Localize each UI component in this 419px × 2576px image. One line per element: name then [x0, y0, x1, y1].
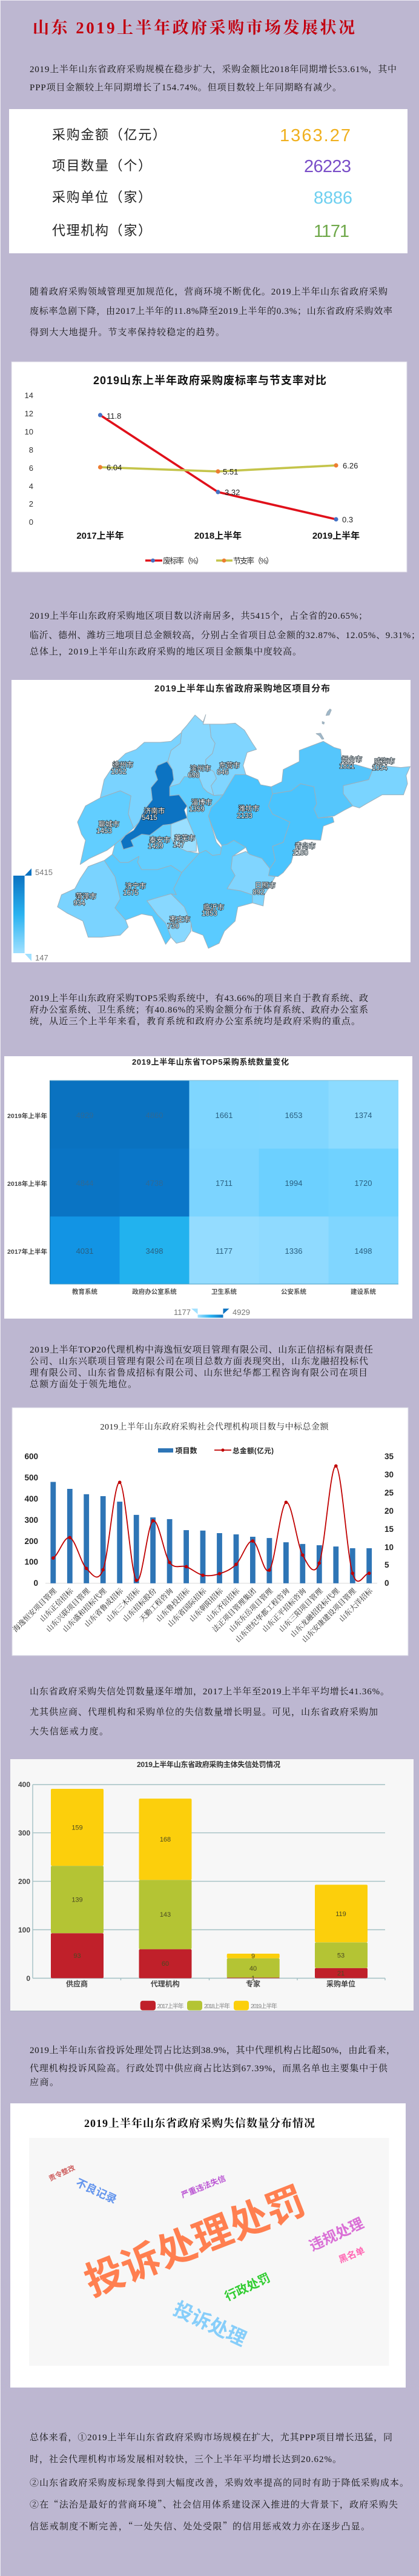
- text block: conclusion: 时，社会代理机构市场发展相对较快，三个上半年平均增长达到20.62%。: [30, 2454, 341, 2465]
- heat map values: 4844: [76, 1179, 93, 1188]
- legend: [140, 2001, 277, 2011]
- text block: top 5 systems: 2019上半年山东政府采购TOP5采购系统中，有43.66%的项目来自于教育系统、政: [30, 993, 368, 1003]
- stack: purchasing units: 21: [337, 1970, 345, 1977]
- data labels: 0.3: [342, 515, 353, 524]
- stack: experts: 9: [251, 1952, 255, 1960]
- city labels: 1429: [148, 843, 163, 850]
- heat map values: 4031: [76, 1246, 93, 1256]
- y axis labels: 0: [29, 518, 33, 527]
- heat map values: 4860: [146, 1111, 163, 1120]
- text block: conclusion: 信惩戒制度不断完善，“一处失信、处处受限”的信用惩戒效力亦在逐步凸显。: [30, 2520, 370, 2532]
- y axis labels: 12: [25, 409, 33, 418]
- city labels: 青岛市: [295, 842, 315, 850]
- stack: purchasing units: [315, 1885, 368, 1978]
- smooth line: total amount: [51, 1464, 371, 1582]
- map legend: 5415: [35, 868, 53, 877]
- rotated agency labels: 山东盛和招标代理: [61, 1586, 108, 1634]
- bars: project count: [50, 1482, 372, 1583]
- heat map values: 1653: [285, 1111, 302, 1120]
- rotated agency labels: 法正项目管理集团: [210, 1586, 258, 1634]
- heat map legend: [174, 1308, 250, 1317]
- city labels: 日照市: [255, 881, 275, 890]
- text block: conclusion: ②山东省政府采购废标现象得到大幅度改善，采购效率提高的同时有助于降低采购成本。: [30, 2477, 409, 2488]
- word cloud terms: 黑名单: [337, 2245, 366, 2265]
- text block: complaints: 应商。: [30, 2077, 59, 2088]
- heat map values: 1720: [355, 1179, 372, 1188]
- y axis labels: 100: [18, 1926, 30, 1934]
- right axis: 0: [384, 1579, 389, 1588]
- heat map values: 1994: [285, 1179, 302, 1188]
- stat: agencies: 代理机构（家）: [52, 223, 151, 238]
- heat map values: 4929: [76, 1111, 93, 1120]
- heat map values: 3498: [146, 1246, 163, 1256]
- city labels: 1054: [372, 765, 388, 772]
- rotated agency labels: 山东三阳项目管理: [277, 1586, 325, 1634]
- y axis labels: 4: [29, 482, 33, 491]
- text block: regions: 总体上，2019上半年山东政府采购的地区项目金额集中度较高。: [30, 646, 302, 657]
- rotated agency labels: 山东省鲁成招标: [82, 1586, 125, 1629]
- stat: purchase amount: [52, 126, 351, 145]
- text block: intro: [30, 64, 397, 93]
- heat map legend: 1177: [174, 1308, 191, 1317]
- map legend: [13, 868, 53, 962]
- data labels: 11.8: [107, 411, 121, 421]
- city labels: 698: [188, 772, 200, 779]
- rotated agency labels: 山东招标股份: [120, 1586, 158, 1623]
- city labels: 莱芜市: [174, 834, 195, 842]
- data labels: [107, 411, 358, 524]
- city labels: 934: [73, 900, 85, 907]
- heat map values: 1711: [216, 1179, 233, 1188]
- left axis: [24, 1452, 38, 1588]
- city labels: 1675: [123, 890, 139, 897]
- heat map values: [76, 1111, 372, 1256]
- legend: 废标率（%）: [163, 556, 203, 565]
- city labels: 892: [252, 889, 265, 896]
- rotated agency labels: 山东三木招标: [104, 1586, 142, 1623]
- city labels: 威海市: [374, 757, 395, 765]
- stack: suppliers: [51, 1789, 104, 1978]
- left axis: 500: [24, 1473, 38, 1482]
- rotated agency labels: 山东世纪华都工程咨询: [233, 1586, 291, 1644]
- y axis labels: 400: [18, 1780, 30, 1789]
- heat map values: 1336: [285, 1246, 302, 1256]
- city labels: 济宁市: [125, 882, 146, 890]
- y axis labels: 2: [29, 499, 33, 508]
- text block: agencies: 2019上半年TOP20代理机构中海逸恒安项目管理有限公司、山东正信招标有限责任: [30, 1344, 373, 1355]
- legend: 2019上半年: [251, 2002, 277, 2010]
- category labels: 2017上半年: [76, 530, 124, 541]
- chart legend: [158, 1446, 274, 1455]
- stack: experts: [227, 1952, 280, 1982]
- text block: regions: [30, 610, 419, 657]
- city labels: [73, 755, 395, 930]
- right axis: 10: [384, 1543, 394, 1552]
- row labels: 2018年上半年: [7, 1180, 47, 1188]
- panel: stacked bar chart: [10, 1759, 414, 2011]
- row labels: 2017年上半年: [7, 1248, 47, 1256]
- column labels: 公安系统: [281, 1288, 306, 1296]
- y axis labels: [18, 1780, 30, 1983]
- chart legend: 总金额(亿元): [233, 1446, 274, 1455]
- line: savings rate: [98, 463, 338, 474]
- column labels: 政府办公室系统: [132, 1288, 177, 1296]
- rotated agency labels: 天勤工程咨询: [137, 1586, 174, 1623]
- text block: efficiency: 得到大大地提升。节支率保持较稳定的趋势。: [30, 327, 225, 338]
- line: bid failure rate: [98, 413, 338, 522]
- y axis labels: 300: [18, 1829, 30, 1837]
- y axis labels: 6: [29, 464, 33, 473]
- y axis labels: 8: [29, 445, 33, 454]
- stack: agencies: 168: [160, 1836, 171, 1843]
- map title: 2019上半年山东省政府采购地区项目分布: [154, 683, 330, 694]
- right axis: 20: [384, 1506, 394, 1516]
- y axis labels: 14: [25, 391, 33, 400]
- city labels: 东营市: [219, 761, 240, 770]
- left axis: 600: [24, 1452, 38, 1461]
- text block: efficiency: 随着政府采购领域管理更加规范化，营商环境不断优化。2019上半年山东省政府采购: [30, 286, 388, 297]
- column labels: 教育系统: [72, 1288, 97, 1296]
- stat: agencies: 1171: [314, 222, 349, 241]
- rotated agency labels: [11, 1586, 375, 1644]
- text block: agencies: 理有限公司、山东省鲁成招标有限公司、山东世纪华都工程咨询有限公司在项目: [30, 1367, 368, 1378]
- panel: line chart: [12, 362, 407, 572]
- city labels: 德州市: [113, 760, 133, 769]
- heat map values: 4738: [146, 1179, 163, 1188]
- category labels: 代理机构: [151, 1979, 180, 1988]
- text block: complaints: 2019上半年山东省投诉处理处罚占比达到38.9%，其中代理机构占比超50%，由此看来，: [30, 2045, 395, 2055]
- word cloud terms: 投诉处理处罚: [79, 2178, 311, 2305]
- heat map legend: 4929: [233, 1308, 250, 1317]
- city labels: 泰安市: [150, 836, 170, 844]
- stat: project count: [52, 157, 351, 176]
- column labels: 卫生系统: [211, 1288, 237, 1296]
- panel: agency combo chart: [11, 1408, 408, 1656]
- word cloud terms: [47, 2163, 366, 2350]
- city labels: 潍坊市: [239, 804, 259, 813]
- panel: word cloud: [10, 2103, 406, 2388]
- city labels: 1821: [339, 763, 355, 770]
- rotated agency labels: 山东正平招标咨询: [260, 1586, 308, 1634]
- right axis: 30: [384, 1470, 394, 1479]
- data labels: 5.51: [223, 467, 238, 476]
- gridlines and axis: [33, 1785, 385, 1980]
- rotated agency labels: 山东朝阳招标: [187, 1586, 225, 1623]
- left axis: 400: [24, 1494, 38, 1503]
- right axis: 5: [384, 1560, 389, 1569]
- city labels: 1853: [202, 910, 217, 917]
- category labels: 供应商: [66, 1979, 88, 1988]
- right axis: 15: [384, 1525, 394, 1534]
- heat map values: 1177: [216, 1246, 233, 1256]
- panel: regional map: [12, 680, 411, 962]
- stat: agencies: [52, 222, 349, 241]
- panel: key figures: [9, 109, 407, 253]
- word cloud terms: 违规处理: [307, 2215, 366, 2255]
- city labels: 2133: [237, 813, 252, 820]
- category labels: 采购单位: [326, 1979, 355, 1988]
- text block: penalties: 大失信惩戒力度。: [30, 1726, 108, 1737]
- city labels: 菏泽市: [76, 892, 96, 900]
- choropleth map of Shandong: [58, 709, 410, 948]
- text block: efficiency: [30, 286, 392, 338]
- legend: 2017上半年: [157, 2002, 184, 2010]
- column labels: [72, 1288, 376, 1296]
- stack: suppliers: 139: [71, 1897, 83, 1904]
- text block: regions: 临沂、德州、潍坊三地项目总金额较高，分别占全省项目总金额的32.87%、12.05%、9.31%；: [30, 630, 419, 641]
- rotated agency labels: 山东安康建设项目管理: [300, 1586, 358, 1644]
- city labels: 烟台市: [341, 755, 362, 764]
- text block: conclusion: [30, 2432, 409, 2532]
- chart title: 2019上半年山东省政府采购主体失信处罚情况: [137, 1760, 280, 1769]
- panel: heat map: [4, 1056, 412, 1319]
- text block: top 5 systems: 统，从近三个上半年来看，教育系统和政府办公室系统均是政府采购的重点。: [30, 1016, 360, 1027]
- city labels: 1359: [189, 806, 205, 813]
- stack: experts: 1: [251, 1975, 255, 1982]
- text block: agencies: 总额方面处于领先地位。: [30, 1379, 137, 1390]
- rotated agency labels: 山东省国际招标: [165, 1586, 208, 1629]
- word cloud title: 2019上半年山东省政府采购失信数量分布情况: [84, 2117, 315, 2129]
- y axis labels: 200: [18, 1877, 30, 1886]
- text block: efficiency: 废标率急剧下降，由2017上半年的11.8%降至2019上半年的0.3%；山东省政府采购效率: [30, 305, 392, 316]
- data labels: 6.26: [343, 461, 358, 470]
- stat: purchasing units: 8886: [314, 188, 352, 208]
- row labels: [7, 1112, 47, 1256]
- text block: penalties: 尤其供应商、代理机构和采购单位的失信数量增长明显。可见，山东省政府采购加: [30, 1706, 378, 1717]
- text block: penalties: [30, 1686, 389, 1737]
- text block: top 5 systems: 府办公室系统、卫生系统；有40.86%的采购金额分布于体育系统、政府办公室系: [30, 1004, 368, 1015]
- chart legend: 项目数: [176, 1446, 197, 1455]
- city labels: 730: [167, 923, 179, 930]
- rotated agency labels: 山东正信招标: [38, 1586, 75, 1623]
- heat map values: 1374: [355, 1111, 372, 1120]
- heat map title: 2019上半年山东省TOP5采购系统数量变化: [132, 1057, 289, 1067]
- chart title: 2019山东上半年政府采购废标率与节支率对比: [93, 374, 326, 387]
- stack: suppliers: 159: [71, 1824, 83, 1831]
- left axis: 300: [24, 1516, 38, 1525]
- city labels: 147: [173, 842, 185, 849]
- y axis labels: 0: [26, 1974, 30, 1983]
- category labels: 2018上半年: [194, 530, 242, 541]
- chart title: 2019上半年山东政府采购社会代理机构项目数与中标总金额: [101, 1422, 329, 1432]
- stack: purchasing units: 119: [335, 1911, 346, 1918]
- stat: project count: 项目数量（个）: [52, 158, 151, 173]
- city labels: 枣庄市: [170, 915, 190, 924]
- title: 山东 2019上半年政府采购市场发展状况: [33, 18, 355, 37]
- left axis: 0: [33, 1579, 38, 1588]
- text block: conclusion: ②在“法治是最好的营商环境”、社会信用体系建设深入推进的大背景下，政府采购失: [30, 2498, 398, 2511]
- row labels: 2019年上半年: [7, 1112, 47, 1120]
- rotated agency labels: 山东鲁投招标: [154, 1586, 192, 1623]
- text block: intro: 2019上半年山东省政府采购规模在稳步扩大，采购金额比2018年同期增长53.61%，其中: [30, 64, 397, 75]
- stack: agencies: 60: [162, 1960, 169, 1968]
- legend: 节支率（%）: [233, 556, 274, 565]
- rotated agency labels: 山东大洋招标: [337, 1586, 375, 1623]
- category labels: [76, 530, 360, 541]
- category labels: [66, 1979, 355, 1988]
- map legend: 147: [35, 953, 48, 962]
- column labels: 建设系统: [351, 1288, 376, 1296]
- y axis labels: [25, 391, 33, 527]
- rotated agency labels: 海逸恒安项目管理: [11, 1586, 58, 1634]
- text block: intro: PPP项目金额较上年同期增长了154.74%。但项目数较上年同期略有减少。: [30, 82, 341, 93]
- rotated agency labels: 山东齐信招标: [204, 1586, 242, 1623]
- text block: penalties: 山东省政府采购失信处罚数量逐年增加，2017上半年至2019上半年平均增长41.36%。: [30, 1686, 389, 1697]
- word cloud terms: 不良记录: [74, 2176, 119, 2206]
- rotated agency labels: 山东东岳项目管理: [227, 1586, 274, 1634]
- text block: top 5 systems: [30, 993, 368, 1027]
- stack: purchasing units: 53: [337, 1952, 345, 1960]
- city labels: 济南市: [144, 807, 165, 815]
- legend: 2018上半年: [204, 2002, 230, 2010]
- word cloud terms: 投诉处理: [170, 2298, 249, 2350]
- city labels: 846: [217, 769, 229, 776]
- text block: complaints: [30, 2045, 395, 2088]
- word cloud terms: 行政处罚: [223, 2271, 272, 2304]
- y axis labels: 10: [25, 427, 33, 436]
- heat map cells: [50, 1080, 398, 1284]
- stat: purchase amount: 采购金额（亿元）: [52, 127, 166, 142]
- rotated agency labels: 山东兴联项目管理: [44, 1586, 91, 1634]
- text block: complaints: 代理机构投诉风险高。行政处罚中供应商占比达到67.39%，而黑名单也主要集中于供: [30, 2063, 388, 2074]
- text block: regions: 2019上半年山东政府采购地区项目数以济南居多，共5415个，占全省的20.65%；: [30, 610, 368, 621]
- stack: agencies: [139, 1799, 191, 1979]
- stack: suppliers: 93: [73, 1952, 81, 1960]
- stack: agencies: 143: [160, 1911, 171, 1919]
- right axis: 35: [384, 1452, 394, 1461]
- stat: purchase amount: 1363.27: [280, 126, 351, 145]
- text block: conclusion: 总体来看，①2019上半年山东省政府采购市场规模在扩大，尤其PPP项目增长迅猛，同: [30, 2432, 392, 2443]
- city labels: 临沂市: [203, 903, 224, 911]
- stat: purchasing units: 采购单位（家）: [52, 190, 151, 205]
- city labels: 聊城市: [99, 820, 119, 828]
- stat: project count: 26223: [304, 157, 351, 176]
- left axis: 200: [24, 1537, 38, 1546]
- category labels: 专家: [246, 1979, 260, 1988]
- category labels: 2019上半年: [312, 530, 360, 541]
- city labels: 淄博市: [191, 798, 212, 807]
- city labels: 5415: [142, 814, 157, 822]
- text block: agencies: 公司、山东兴联项目管理有限公司在项目总数方面表现突出，山东龙融招投标代: [30, 1356, 368, 1366]
- city labels: 滨州市: [190, 764, 211, 773]
- word cloud terms: 责令整改: [47, 2163, 76, 2183]
- city labels: 2180: [292, 850, 308, 857]
- right axis: 25: [384, 1488, 394, 1497]
- heat map values: 1498: [355, 1246, 372, 1256]
- data labels: 6.04: [107, 463, 122, 472]
- rotated agency labels: 山东龙融招投标代理: [288, 1586, 341, 1639]
- heat map values: 1661: [216, 1111, 233, 1120]
- city labels: 1052: [111, 768, 127, 776]
- stat: purchasing units: [52, 188, 352, 208]
- word cloud terms: 严重违法失信: [180, 2174, 227, 2200]
- legend: [145, 556, 274, 565]
- stack: experts: 40: [249, 1965, 257, 1972]
- left axis: 100: [24, 1557, 38, 1566]
- text block: agencies: [30, 1344, 373, 1390]
- right axis: [384, 1452, 394, 1588]
- data labels: 3.32: [225, 488, 240, 497]
- city labels: 1453: [96, 828, 112, 835]
